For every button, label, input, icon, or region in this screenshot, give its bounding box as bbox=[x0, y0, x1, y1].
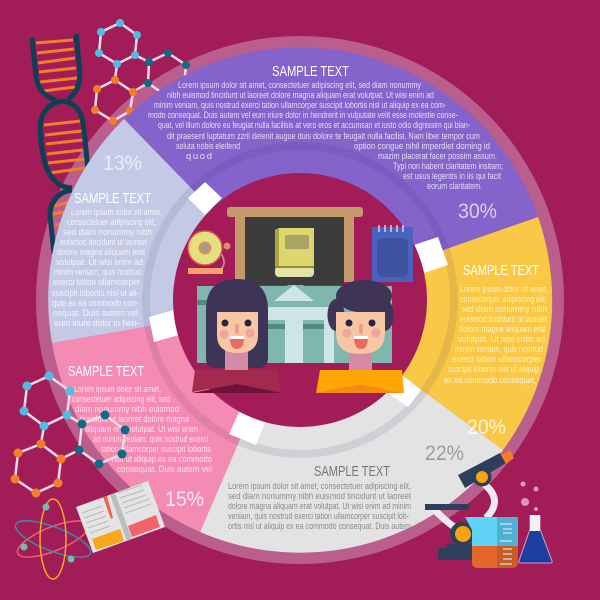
icon: bell bbox=[188, 231, 230, 274]
text block: purple: option congue nihil imperdiet doming id bbox=[354, 141, 490, 152]
text block: lavender: quip ex ea commodo con- bbox=[52, 298, 138, 309]
text block: yellow: suscipit lobortis nisl ut aliquip bbox=[448, 364, 539, 375]
center circle bbox=[173, 173, 427, 427]
text block: pink: nisl ut aliquip ex ea commodo bbox=[112, 454, 212, 465]
text block: pink: consectetuer adipiscing elit, sed bbox=[72, 394, 170, 405]
text block: purple: dit praesent luptatum zzril delenit augue duis dolore te feugait nulla facilisi. Nam liber tempor cum bbox=[167, 131, 480, 142]
text block: purple: minim veniam, quis nostrud exerci tation ullamcorper suscipit lobortis nisl ut aliquip ex ea com- bbox=[154, 100, 446, 111]
text block: yellow: SAMPLE TEXT bbox=[463, 263, 539, 279]
text block: lavender: suscipit lobortis nisl ut ali- bbox=[52, 288, 139, 299]
icon: textbook bbox=[275, 228, 314, 277]
text block: purple: SAMPLE TEXT bbox=[272, 64, 349, 80]
text block: pink: Lorem ipsum dolor sit amet, bbox=[74, 384, 161, 395]
text block: lavender: sequat. Duis autem vel bbox=[53, 308, 138, 319]
text block: grey: 22% bbox=[425, 442, 464, 465]
text block: grey: veniam, quis nostrud exerci tation ullamcorper suscipit lob- bbox=[228, 511, 409, 522]
text block: grey: sed diam nonummy nibh euismod tincidunt ut laoreet bbox=[228, 491, 411, 502]
text block: yellow: exerci tation ullamcorper bbox=[452, 354, 541, 365]
text block: yellow: volutpat. Ut wisi enim ad bbox=[458, 334, 545, 345]
text block: lavender: eum iriure dolor in hen- bbox=[54, 318, 139, 329]
text block: yellow: minim veniam, quis nostrud bbox=[455, 344, 543, 355]
text block: lavender bbox=[52, 152, 162, 329]
text block: lavender: 13% bbox=[103, 152, 142, 175]
text block: lavender: sed diam nonummy nibh bbox=[63, 227, 152, 238]
text block: purple: quat, vel illum dolore eu feugiat nulla facilisis at vero eros et accumsan et iusto odio dignissim qui blan- bbox=[158, 120, 470, 131]
text block: grey bbox=[228, 442, 464, 532]
icon: flask bbox=[519, 482, 552, 563]
text block: purple: 30% bbox=[458, 200, 497, 223]
panel: pink segment 15% bbox=[52, 300, 300, 532]
text block: pink: consequat. Duis autem vel bbox=[117, 464, 212, 475]
text block: purple: eorum claritatem. bbox=[427, 181, 482, 192]
text block: yellow: Lorem ipsum dolor sit amet, bbox=[460, 284, 548, 295]
text block: lavender: Lorem ipsum dolor sit amet, bbox=[71, 207, 162, 218]
figure: girl bbox=[192, 279, 281, 393]
icon: DNA helix bbox=[32, 34, 88, 254]
molecule: upper bbox=[91, 19, 190, 125]
panel: purple segment 30% bbox=[124, 47, 538, 300]
text block: lavender: SAMPLE TEXT bbox=[74, 191, 151, 207]
text block: pink: SAMPLE TEXT bbox=[68, 364, 144, 380]
text block: lavender: dolore magna aliquam erat bbox=[57, 247, 145, 258]
panel: lavender segment 13% bbox=[48, 119, 300, 343]
figure: boy bbox=[316, 280, 404, 393]
text block: pink: aliquam erat volutpat. Ut wisi enim bbox=[85, 424, 198, 435]
text block: pink: tation ullamcorper suscipit lobortis bbox=[101, 444, 211, 455]
text block: lavender: consectetuer adipiscing elit, bbox=[67, 217, 156, 228]
text block: grey: ortis nisl ut aliquip ex ea commodo consequat. Duis autem bbox=[228, 521, 411, 532]
panel: yellow segment 20% bbox=[300, 217, 552, 450]
text block: purple: quod bbox=[186, 151, 212, 162]
text block: purple: Lorem ipsum dolor sit amet, consectetuer adipiscing elit, sed diam nonummy bbox=[178, 80, 421, 91]
text block: grey: dolore magna aliquam erat volutpat. Ut wisi enim ad minim bbox=[228, 501, 411, 512]
text block: grey: Lorem ipsum dolor sit amet, consectetuer adipiscing elit, bbox=[228, 481, 411, 492]
text block: pink: 15% bbox=[165, 488, 204, 511]
text block: yellow: euismod tincidunt ut laoreet bbox=[460, 314, 547, 325]
text block: yellow: ex ea commodo consequat, bbox=[444, 375, 536, 386]
text block: pink: tincidunt ut laoreet dolore magna bbox=[80, 414, 190, 425]
illustration: blackboard bbox=[227, 207, 363, 285]
text block: yellow: consectetuer adipiscing elit, bbox=[460, 294, 547, 305]
text block: purple: modo consequat. Duis autem vel eum iriure dolor in hendrerit in vulputate velit esse molestie conse- bbox=[148, 110, 458, 121]
text block: lavender: euismod tincidunt ut laoreet bbox=[60, 237, 147, 248]
text block: purple bbox=[148, 64, 503, 223]
icon: beaker bbox=[465, 517, 518, 568]
text block: yellow: sed diam nonummy nibh bbox=[461, 304, 547, 315]
icon: microscope bbox=[425, 450, 514, 560]
icon: open book bbox=[76, 481, 165, 553]
text block: purple: nibh euismod tincidunt ut laoreet dolore magna aliquam erat volutpat. Ut wisi enim ad bbox=[167, 90, 434, 101]
text block: pink: diam nonummy nibh euismod bbox=[75, 404, 179, 415]
text block: pink: ad minim veniam, quis nostrud exerci bbox=[93, 434, 208, 445]
outer ring bbox=[36, 36, 564, 564]
text block: grey: SAMPLE TEXT bbox=[314, 464, 390, 480]
molecule: lower bbox=[10, 372, 130, 498]
illustration: school building bbox=[197, 278, 392, 363]
text block: lavender: volutpat. Ut wisi enim ad bbox=[56, 257, 143, 268]
icon: atom bbox=[11, 499, 95, 579]
text block: yellow: 20% bbox=[467, 416, 506, 439]
text block: yellow: dolore magna aliquam erat bbox=[459, 324, 546, 335]
text block: purple: soluta nobis eleifend bbox=[176, 141, 240, 152]
text block: lavender: minim veniam, quis nostrud bbox=[54, 267, 141, 278]
marker: white tabs bbox=[149, 182, 448, 445]
text block: purple: est usus legentis in iis qui facit bbox=[403, 171, 501, 182]
text block: yellow bbox=[444, 263, 548, 439]
text block: pink bbox=[68, 364, 212, 511]
text block: purple: Typi non habent claritatem insitam; bbox=[393, 161, 503, 172]
panel: grey segment 22% bbox=[200, 300, 503, 553]
text block: purple: mazim placerat facer possim assum. bbox=[378, 151, 497, 162]
inner shade ring bbox=[146, 146, 454, 454]
text block: lavender: exerci tation ullamcorper bbox=[53, 277, 140, 288]
icon: notebook bbox=[372, 225, 413, 282]
